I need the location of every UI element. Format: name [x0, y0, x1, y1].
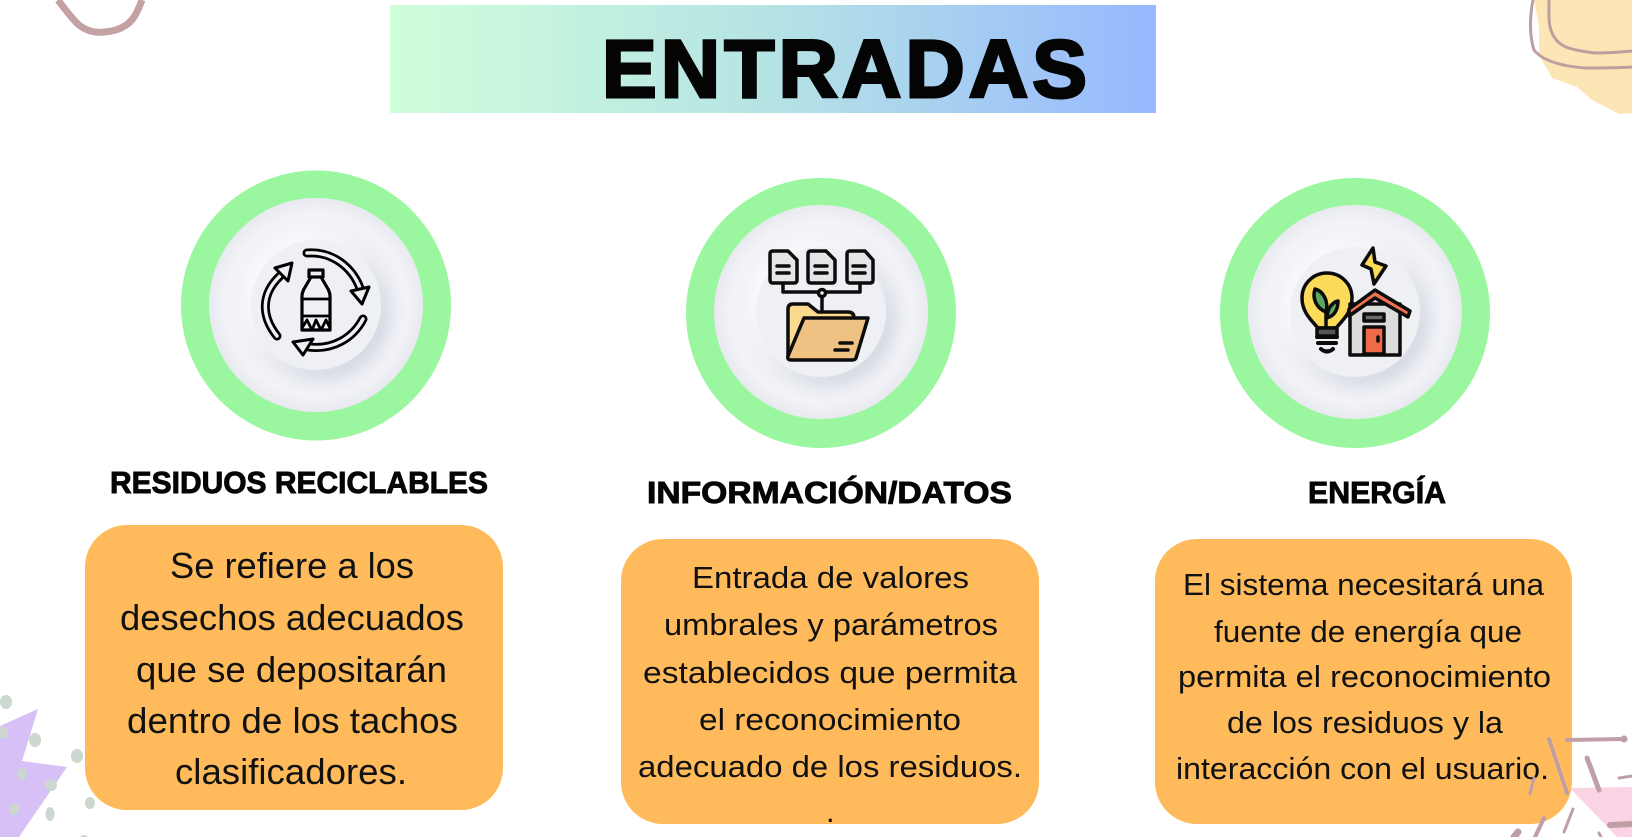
decoration: bottom-left star and dots	[0, 695, 95, 837]
icon: files and folder	[770, 251, 873, 360]
panel: datos: adecuado de los residuos.	[638, 749, 1022, 784]
heading: residuos: RESIDUOS RECICLABLES	[110, 465, 488, 500]
panel: residuos: dentro de los tachos	[127, 700, 458, 741]
panel: energia: fuente de energía que	[1214, 614, 1522, 649]
ring: datos	[686, 178, 956, 448]
panel: energia	[1155, 539, 1572, 824]
panel: datos	[621, 539, 1039, 829]
panel: datos: umbrales y parámetros	[664, 607, 998, 642]
icon: bulb and house	[1302, 248, 1410, 355]
panel: residuos	[85, 525, 503, 810]
title band	[390, 5, 1156, 113]
panel: datos: el reconocimiento	[699, 702, 961, 737]
title: ENTRADAS	[602, 24, 1087, 115]
panel: energia: interacción con el usuario.	[1176, 751, 1549, 786]
panel: datos: establecidos que permita	[643, 655, 1018, 690]
icon: bottle recycling	[265, 253, 369, 355]
panel: datos: .	[826, 794, 835, 829]
panel: residuos: desechos adecuados	[120, 597, 464, 638]
panel: residuos: clasificadores.	[175, 751, 407, 792]
panel: energia: El sistema necesitará una	[1183, 567, 1545, 602]
panel: energia: de los residuos y la	[1227, 705, 1504, 740]
decoration: top-left curve	[58, 0, 142, 32]
decoration: bottom-right pink shape and strokes	[1514, 737, 1632, 837]
panel: residuos: Se refiere a los	[170, 545, 414, 586]
panel: datos: Entrada de valores	[692, 560, 969, 595]
ring: residuos	[181, 170, 451, 440]
heading: datos: INFORMACIÓN/DATOS	[647, 474, 1012, 510]
panel: energia: permita el reconocimiento	[1178, 659, 1551, 694]
panel: residuos: que se depositarán	[136, 649, 447, 690]
ring: energia	[1220, 178, 1490, 448]
heading: energia: ENERGÍA	[1308, 475, 1446, 510]
decoration: top-right blob	[1530, 0, 1632, 114]
